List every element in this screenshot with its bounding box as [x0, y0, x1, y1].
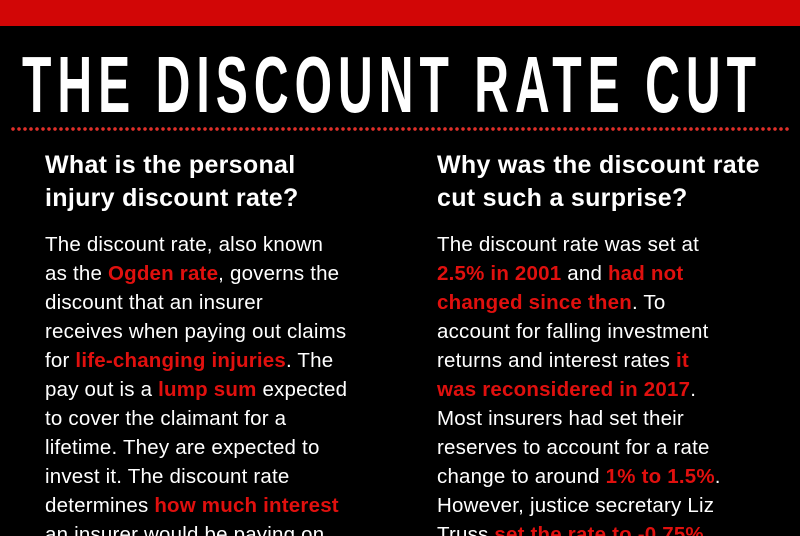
body left: as the Ogden rate, governs the: [45, 262, 339, 285]
body right: account for falling investment: [437, 320, 708, 343]
body left: invest it. The discount rate: [45, 465, 290, 488]
body right: However, justice secretary Liz: [437, 494, 714, 517]
body left: for life-changing injuries. The: [45, 349, 333, 372]
body left: determines how much interest: [45, 494, 339, 517]
body left: pay out is a lump sum expected: [45, 378, 347, 401]
body right: [437, 233, 721, 536]
panel: why a surprise: [437, 151, 760, 536]
top red bar: [0, 0, 800, 26]
heading left: [45, 151, 299, 212]
body right: The discount rate was set at: [437, 233, 699, 256]
body right: returns and interest rates it: [437, 349, 689, 372]
panel: what is the discount rate: [45, 151, 347, 536]
heading right: [437, 151, 760, 212]
body left: receives when paying out claims: [45, 320, 346, 343]
body left: [45, 233, 347, 536]
body left: discount that an insurer: [45, 291, 263, 314]
body left: to cover the claimant for a: [45, 407, 286, 430]
heading left: injury discount rate?: [45, 184, 299, 212]
body right: reserves to account for a rate: [437, 436, 710, 459]
body right: changed since then. To: [437, 291, 665, 314]
body left: lifetime. They are expected to: [45, 436, 320, 459]
heading left: What is the personal: [45, 151, 295, 179]
body right: 2.5% in 2001 and had not: [437, 262, 683, 285]
body right: Most insurers had set their: [437, 407, 684, 430]
heading right: Why was the discount rate: [437, 151, 760, 179]
body left: The discount rate, also known: [45, 233, 323, 256]
body right: was reconsidered in 2017.: [437, 378, 696, 401]
heading right: cut such a surprise?: [437, 184, 688, 212]
body right: change to around 1% to 1.5%.: [437, 465, 721, 488]
